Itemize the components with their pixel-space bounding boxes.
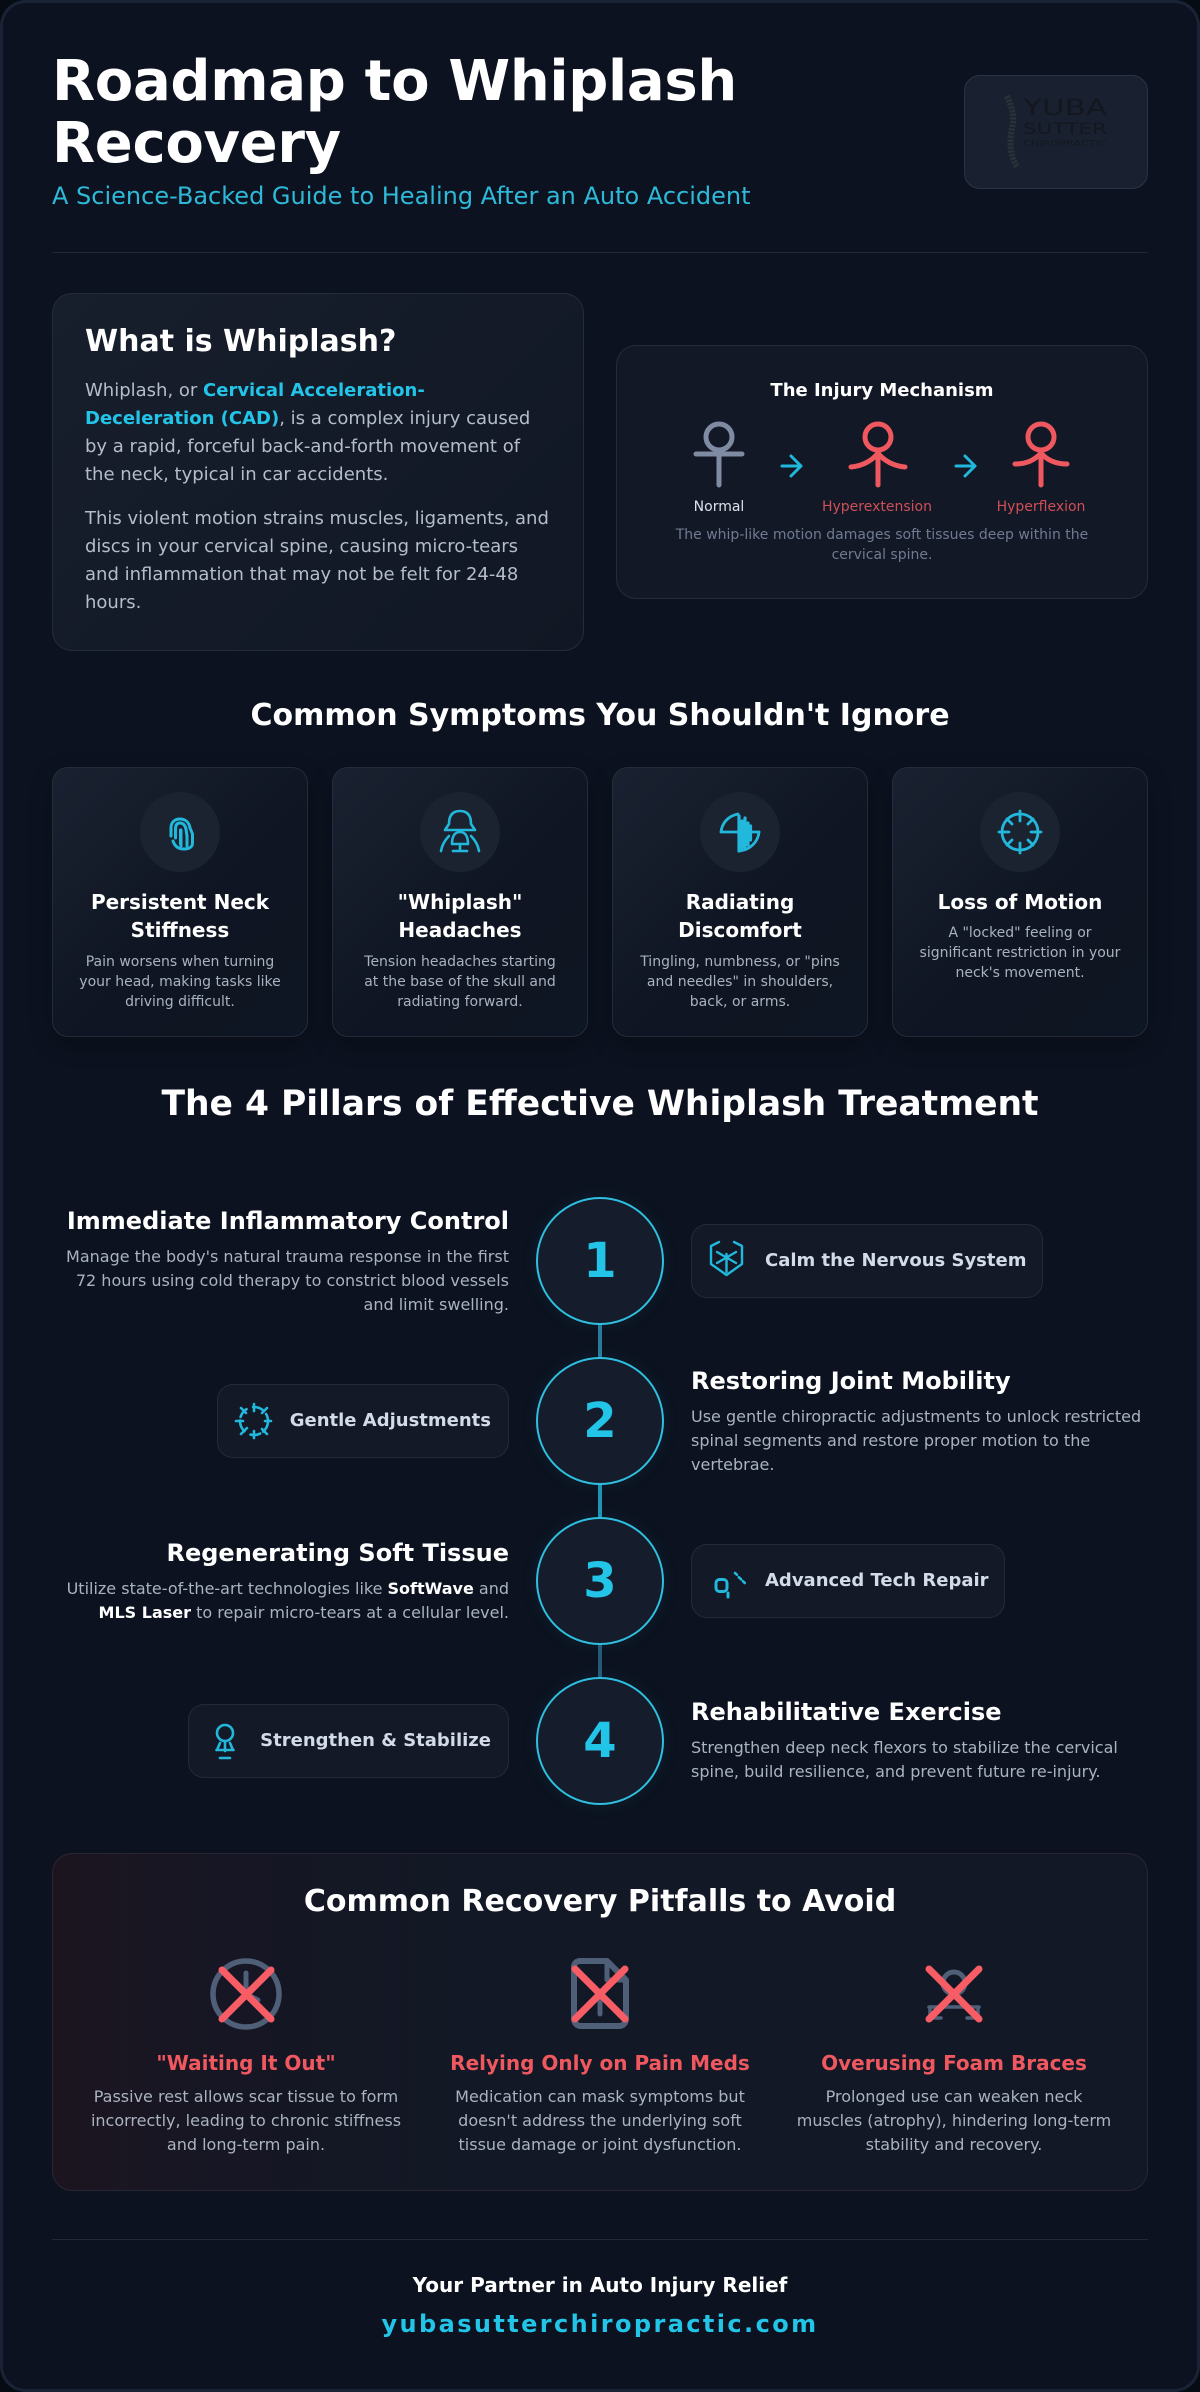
pillar 2 title: Restoring Joint Mobility bbox=[691, 1367, 1011, 1395]
pillar 4 title: Rehabilitative Exercise bbox=[691, 1698, 1002, 1726]
panel: what is whiplash bbox=[52, 293, 584, 651]
pitfall 3 text bbox=[797, 2087, 1111, 2154]
caption: cervical spine. bbox=[832, 547, 932, 563]
panel: injury mechanism bbox=[616, 345, 1148, 599]
pillar 1 description: 72 hours using cold therapy to constrict blood vessels bbox=[76, 1271, 509, 1290]
symptom title bbox=[398, 890, 522, 942]
pillar 3 description: Utilize state-of-the-art technologies like SoftWave and bbox=[67, 1579, 509, 1598]
tag label: Gentle Adjustments bbox=[290, 1410, 491, 1431]
symptom title: Stiffness bbox=[131, 918, 229, 942]
symptom text: significant restriction in your bbox=[920, 945, 1120, 961]
caption: The whip-like motion damages soft tissues deep within the bbox=[676, 527, 1088, 543]
symptom title: "Whiplash" bbox=[398, 890, 522, 914]
pillar 4 tag bbox=[188, 1704, 509, 1778]
icon: strength figure bbox=[215, 1724, 235, 1760]
pitfall 1 text: incorrectly, leading to chronic stiffness bbox=[91, 2111, 401, 2130]
pillar 3 title: Regenerating Soft Tissue bbox=[166, 1539, 509, 1567]
intro paragraph: by a rapid, forceful back-and-forth movement of bbox=[85, 436, 520, 457]
pitfall 3 text: Prolonged use can weaken neck bbox=[826, 2087, 1082, 2106]
pillar 1 description: Manage the body's natural trauma response in the first bbox=[66, 1247, 509, 1266]
tag label: Calm the Nervous System bbox=[765, 1250, 1026, 1271]
pillar 2 description: vertebrae. bbox=[691, 1455, 774, 1474]
step 1 number: 1 bbox=[583, 1233, 617, 1289]
label: normal: Normal bbox=[694, 499, 744, 515]
logo badge: YUBA bbox=[1022, 96, 1107, 121]
timeline connector 3 bbox=[598, 1643, 602, 1679]
intro paragraph: the neck, typical in car accidents. bbox=[85, 464, 388, 485]
symptom title: Discomfort bbox=[678, 918, 802, 942]
symptom text: Pain worsens when turning bbox=[86, 954, 274, 970]
icon: adjustment gear bbox=[234, 1402, 272, 1440]
step 3 number bbox=[536, 1517, 664, 1645]
pitfall 1 text bbox=[91, 2087, 401, 2154]
symptom title: Headaches bbox=[398, 918, 522, 942]
icon: headaches bbox=[420, 792, 500, 872]
icon: loss of motion bbox=[980, 792, 1060, 872]
second paragraph: and inflammation that may not be felt for 24-48 bbox=[85, 564, 518, 585]
pillar 2 description: Use gentle chiropractic adjustments to unlock restricted bbox=[691, 1407, 1141, 1426]
caption bbox=[676, 527, 1088, 563]
symptom text: driving difficult. bbox=[125, 994, 235, 1010]
symptom text bbox=[79, 954, 281, 1010]
symptom text: neck's movement. bbox=[955, 965, 1085, 981]
website: yubasutterchiropractic.com bbox=[381, 2310, 818, 2338]
step 2 number bbox=[536, 1357, 664, 1485]
pitfall 1 text: and long-term pain. bbox=[167, 2135, 325, 2154]
step 4 number bbox=[536, 1677, 664, 1805]
pitfall 2 text: Medication can mask symptoms but bbox=[455, 2087, 745, 2106]
pitfall 2 text: tissue damage or joint dysfunction. bbox=[459, 2135, 741, 2154]
pillar 2 tag bbox=[217, 1384, 509, 1458]
pillar 1 text bbox=[66, 1207, 509, 1314]
card: radiating discomfort bbox=[612, 767, 868, 1037]
heading: pillars: The 4 Pillars of Effective Whiplash Treatment bbox=[161, 1084, 1039, 1124]
symptom text: and needles" in shoulders, bbox=[647, 974, 833, 990]
heading: symptoms: Common Symptoms You Shouldn't Ignore bbox=[250, 698, 950, 733]
icon: neck stiffness bbox=[140, 792, 220, 872]
icon: foam brace crossed bbox=[926, 1966, 982, 2022]
intro paragraph: Deceleration (CAD), is a complex injury caused bbox=[85, 408, 530, 429]
pillar 4 description bbox=[691, 1738, 1118, 1781]
pitfall 1 text: Passive rest allows scar tissue to form bbox=[94, 2087, 398, 2106]
label: hyperflexion: Hyperflexion bbox=[997, 499, 1085, 515]
step 4 number: 4 bbox=[583, 1713, 617, 1769]
footer bbox=[381, 2273, 818, 2338]
intro paragraph bbox=[85, 380, 530, 485]
step 2 number: 2 bbox=[583, 1393, 617, 1449]
footer tagline: Your Partner in Auto Injury Relief bbox=[413, 2273, 787, 2297]
timeline connector 1 bbox=[598, 1323, 602, 1359]
symptom text: Tingling, numbness, or "pins bbox=[640, 954, 840, 970]
pillar 2 description: spinal segments and restore proper motion to the bbox=[691, 1431, 1090, 1450]
symptom text: A "locked" feeling or bbox=[948, 925, 1092, 941]
symptom text bbox=[364, 954, 556, 1010]
symptom text: back, or arms. bbox=[690, 994, 790, 1010]
card: neck stiffness bbox=[52, 767, 308, 1037]
symptom text: radiating forward. bbox=[397, 994, 523, 1010]
icon: radiating discomfort bbox=[700, 792, 780, 872]
panel: pitfalls bbox=[52, 1853, 1148, 2191]
symptom title: Loss of Motion bbox=[938, 890, 1102, 914]
symptom title bbox=[678, 890, 802, 942]
title bbox=[52, 49, 737, 176]
subtitle: A Science-Backed Guide to Healing After an Auto Accident bbox=[52, 182, 751, 210]
card: headaches bbox=[332, 767, 588, 1037]
symptom text: Tension headaches starting bbox=[364, 954, 556, 970]
tag label: Advanced Tech Repair bbox=[765, 1570, 989, 1591]
step 1 number bbox=[536, 1197, 664, 1325]
label: hyperextension: Hyperextension bbox=[822, 499, 932, 515]
pitfall 3 title: Overusing Foam Braces bbox=[821, 2051, 1087, 2075]
pillar 1 description bbox=[66, 1247, 509, 1314]
title: Recovery bbox=[52, 111, 341, 176]
pitfall 3 text: stability and recovery. bbox=[866, 2135, 1042, 2154]
pitfall 2 text bbox=[455, 2087, 745, 2154]
intro paragraph: Whiplash, or Cervical Acceleration- bbox=[85, 380, 425, 401]
logo badge: CHIROPRACTIC bbox=[1023, 139, 1108, 148]
second paragraph: hours. bbox=[85, 592, 141, 613]
pillar 3 description bbox=[67, 1579, 509, 1622]
symptom text: at the base of the skull and bbox=[364, 974, 556, 990]
second paragraph bbox=[84, 508, 549, 613]
symptom text bbox=[920, 925, 1120, 981]
pillar 3 description: MLS Laser to repair micro-tears at a cellular level. bbox=[99, 1603, 509, 1622]
title: Roadmap to Whiplash bbox=[52, 49, 737, 114]
second paragraph: discs in your cervical spine, causing micro-tears bbox=[85, 536, 518, 557]
pillar 1 description: and limit swelling. bbox=[364, 1295, 509, 1314]
symptom title bbox=[91, 890, 270, 942]
pillar 3 text bbox=[67, 1539, 509, 1622]
mechanism title: The Injury Mechanism bbox=[770, 380, 994, 401]
card: loss of motion bbox=[892, 767, 1148, 1037]
pitfall 2 text: doesn't address the underlying soft bbox=[458, 2111, 742, 2130]
icon: clock crossed bbox=[210, 1958, 282, 2030]
second paragraph: This violent motion strains muscles, ligaments, and bbox=[85, 508, 549, 529]
pillar 4 description: Strengthen deep neck flexors to stabilize the cervical bbox=[691, 1738, 1118, 1757]
symptom title: Radiating bbox=[686, 890, 794, 914]
header bbox=[52, 49, 751, 210]
logo badge bbox=[964, 75, 1148, 189]
symptom text: your head, making tasks like bbox=[79, 974, 281, 990]
symptom text bbox=[640, 954, 840, 1010]
pillar 2 text bbox=[691, 1367, 1141, 1474]
pillar 3 tag bbox=[691, 1544, 1005, 1618]
tag label: Strengthen & Stabilize bbox=[260, 1730, 491, 1751]
pitfalls heading: Common Recovery Pitfalls to Avoid bbox=[304, 1884, 896, 1919]
icon: shield bbox=[710, 1240, 744, 1276]
diagram: motion figures bbox=[694, 422, 1070, 488]
icon: pill document crossed bbox=[571, 1958, 629, 2029]
symptom title: Persistent Neck bbox=[91, 890, 269, 914]
pitfall 3 text: muscles (atrophy), hindering long-term bbox=[797, 2111, 1111, 2130]
pillar 4 text bbox=[691, 1698, 1118, 1781]
pitfall 1 title: "Waiting It Out" bbox=[156, 2051, 336, 2075]
heading: What is Whiplash? bbox=[85, 324, 396, 359]
pillar 2 description bbox=[691, 1407, 1141, 1474]
pillar 4 description: spine, build resilience, and prevent future re-injury. bbox=[691, 1762, 1100, 1781]
icon: laser tech bbox=[714, 1572, 746, 1598]
pitfall 2 title: Relying Only on Pain Meds bbox=[450, 2051, 750, 2075]
step 3 number: 3 bbox=[583, 1553, 617, 1609]
pillar 1 title: Immediate Inflammatory Control bbox=[67, 1207, 509, 1235]
logo badge: SUTTER bbox=[1023, 119, 1107, 138]
timeline connector 2 bbox=[598, 1483, 602, 1519]
pillar 1 tag bbox=[691, 1224, 1043, 1298]
